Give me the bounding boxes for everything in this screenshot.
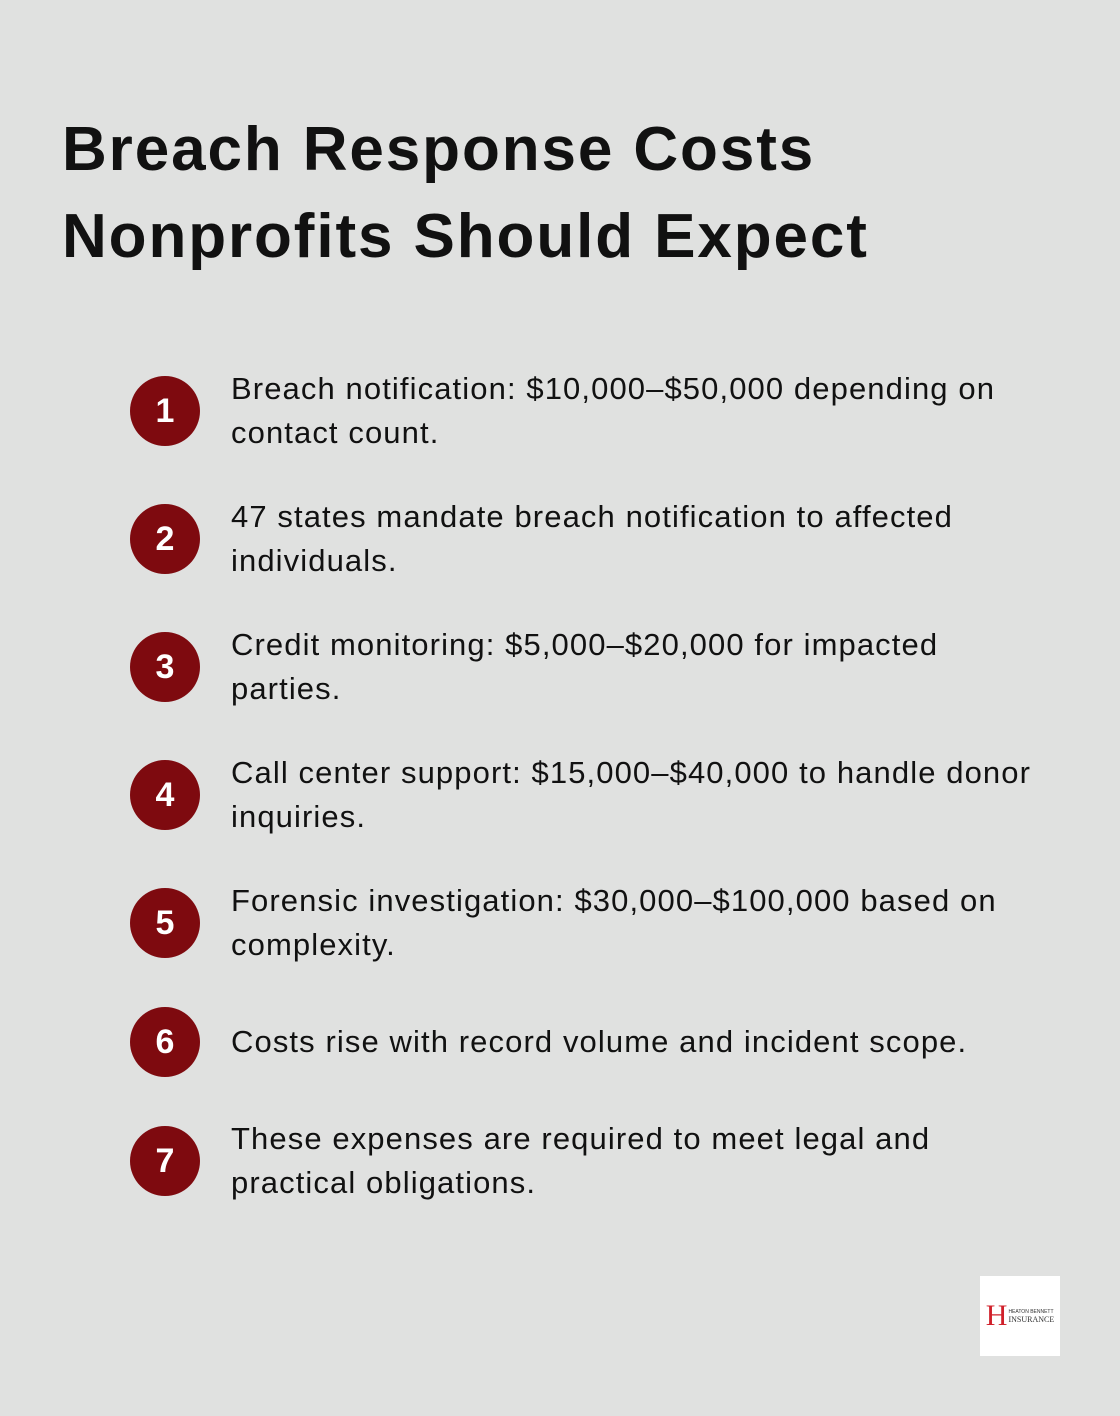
logo [980,1276,1060,1356]
item 5: 5 [156,904,174,942]
item 6: 6 [156,1022,174,1060]
list of costs [130,371,1031,1200]
item 7: 7 [156,1142,174,1180]
item 3: parties. [231,671,341,706]
item 1 [130,371,995,450]
item 2 [130,499,953,578]
item 4: 4 [156,776,174,814]
item 3: 3 [156,648,174,686]
item 2: 2 [156,520,174,558]
logo: H [986,1299,1007,1332]
item 1: contact count. [231,415,439,450]
title: Nonprofits Should Expect [62,202,869,271]
item 5: complexity. [231,927,396,962]
item 5: Forensic investigation: $30,000–$100,000 based on [231,883,997,918]
item 1: Breach notification: $10,000–$50,000 depending on [231,371,995,406]
title: Breach Response Costs [62,115,815,184]
item 2: individuals. [231,543,398,578]
title [62,115,869,271]
item 6: Costs rise with record volume and incident scope. [231,1024,967,1059]
item 5 [130,883,997,962]
item 6 [130,1007,967,1077]
item 7: These expenses are required to meet legal and [231,1121,930,1156]
item 4 [130,755,1031,834]
item 2: 47 states mandate breach notification to affected [231,499,953,534]
item 7 [130,1121,930,1200]
item 4: inquiries. [231,799,366,834]
logo: INSURANCE [1008,1314,1054,1324]
item 3: Credit monitoring: $5,000–$20,000 for impacted [231,627,938,662]
item 1: 1 [156,392,174,430]
item 4: Call center support: $15,000–$40,000 to handle donor [231,755,1031,790]
item 7: practical obligations. [231,1165,536,1200]
logo: HEATON BENNETT [1008,1308,1054,1314]
item 3 [130,627,938,706]
